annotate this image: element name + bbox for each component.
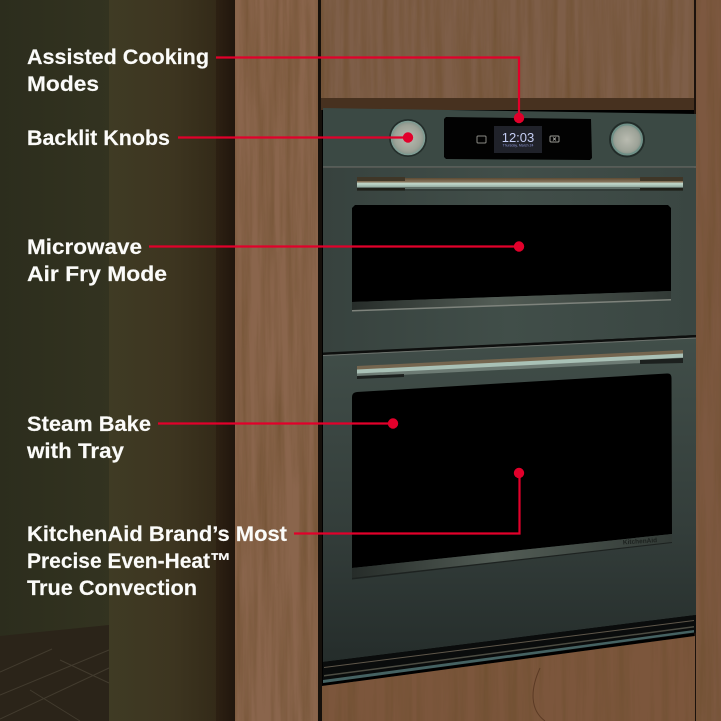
background: shadow gap: [216, 0, 235, 721]
lower wood cabinet: [321, 632, 695, 721]
clock date: Thursday, March 24: [503, 144, 533, 148]
wood column left: [235, 0, 319, 721]
callout: steam bake line: [158, 418, 398, 429]
label: steam bake with tray: Steam Bake: [27, 412, 151, 436]
label: microwave air fry mode: Microwave: [27, 235, 142, 259]
upper door window: [352, 205, 671, 312]
lower handle: [357, 350, 683, 379]
background: olive panel: [109, 0, 217, 721]
label: steam bake with tray: [26, 412, 151, 463]
callout: assisted cooking line: [216, 58, 524, 123]
icon: left touch button: [477, 136, 486, 143]
display panel: [444, 117, 592, 160]
cabinet gap: [318, 0, 322, 721]
icon: right touch button: [550, 136, 559, 142]
callout: backlit knobs line: [178, 132, 413, 143]
oven control panel: [323, 108, 696, 167]
label: steam bake with tray: with Tray: [26, 439, 124, 463]
brand mark: KitchenAid: [623, 537, 657, 546]
lower door window: [352, 373, 672, 580]
clock time: 12:03: [502, 130, 534, 145]
background: dark green wall: [0, 0, 110, 721]
left knob: [389, 119, 427, 157]
label: assisted cooking modes: [27, 45, 209, 96]
callout: convection line: [294, 468, 524, 534]
bottom vent: [323, 615, 696, 683]
clock screen: [494, 126, 542, 153]
label: microwave air fry mode: Air Fry Mode: [27, 262, 167, 286]
right knob: [609, 122, 645, 158]
label: backlit knobs: Backlit Knobs: [27, 126, 170, 150]
wood strip right: [694, 0, 721, 721]
label: true convection: KitchenAid Brand’s Most: [27, 522, 287, 546]
upper door: [323, 166, 696, 353]
label: true convection: [27, 522, 287, 600]
upper handle: [357, 177, 683, 191]
upper wood cabinet: [321, 0, 695, 110]
label: microwave air fry mode: [27, 235, 167, 286]
label: true convection: Precise Even-Heat™: [27, 549, 231, 573]
callout: microwave line: [149, 241, 524, 252]
lower door: [323, 335, 696, 662]
label: assisted cooking modes: Assisted Cooking: [27, 45, 209, 69]
floor: herringbone wood: [0, 625, 109, 721]
label: assisted cooking modes: Modes: [27, 72, 99, 96]
callout lines: [149, 58, 524, 534]
label: true convection: True Convection: [27, 576, 197, 600]
oven: [323, 108, 696, 683]
